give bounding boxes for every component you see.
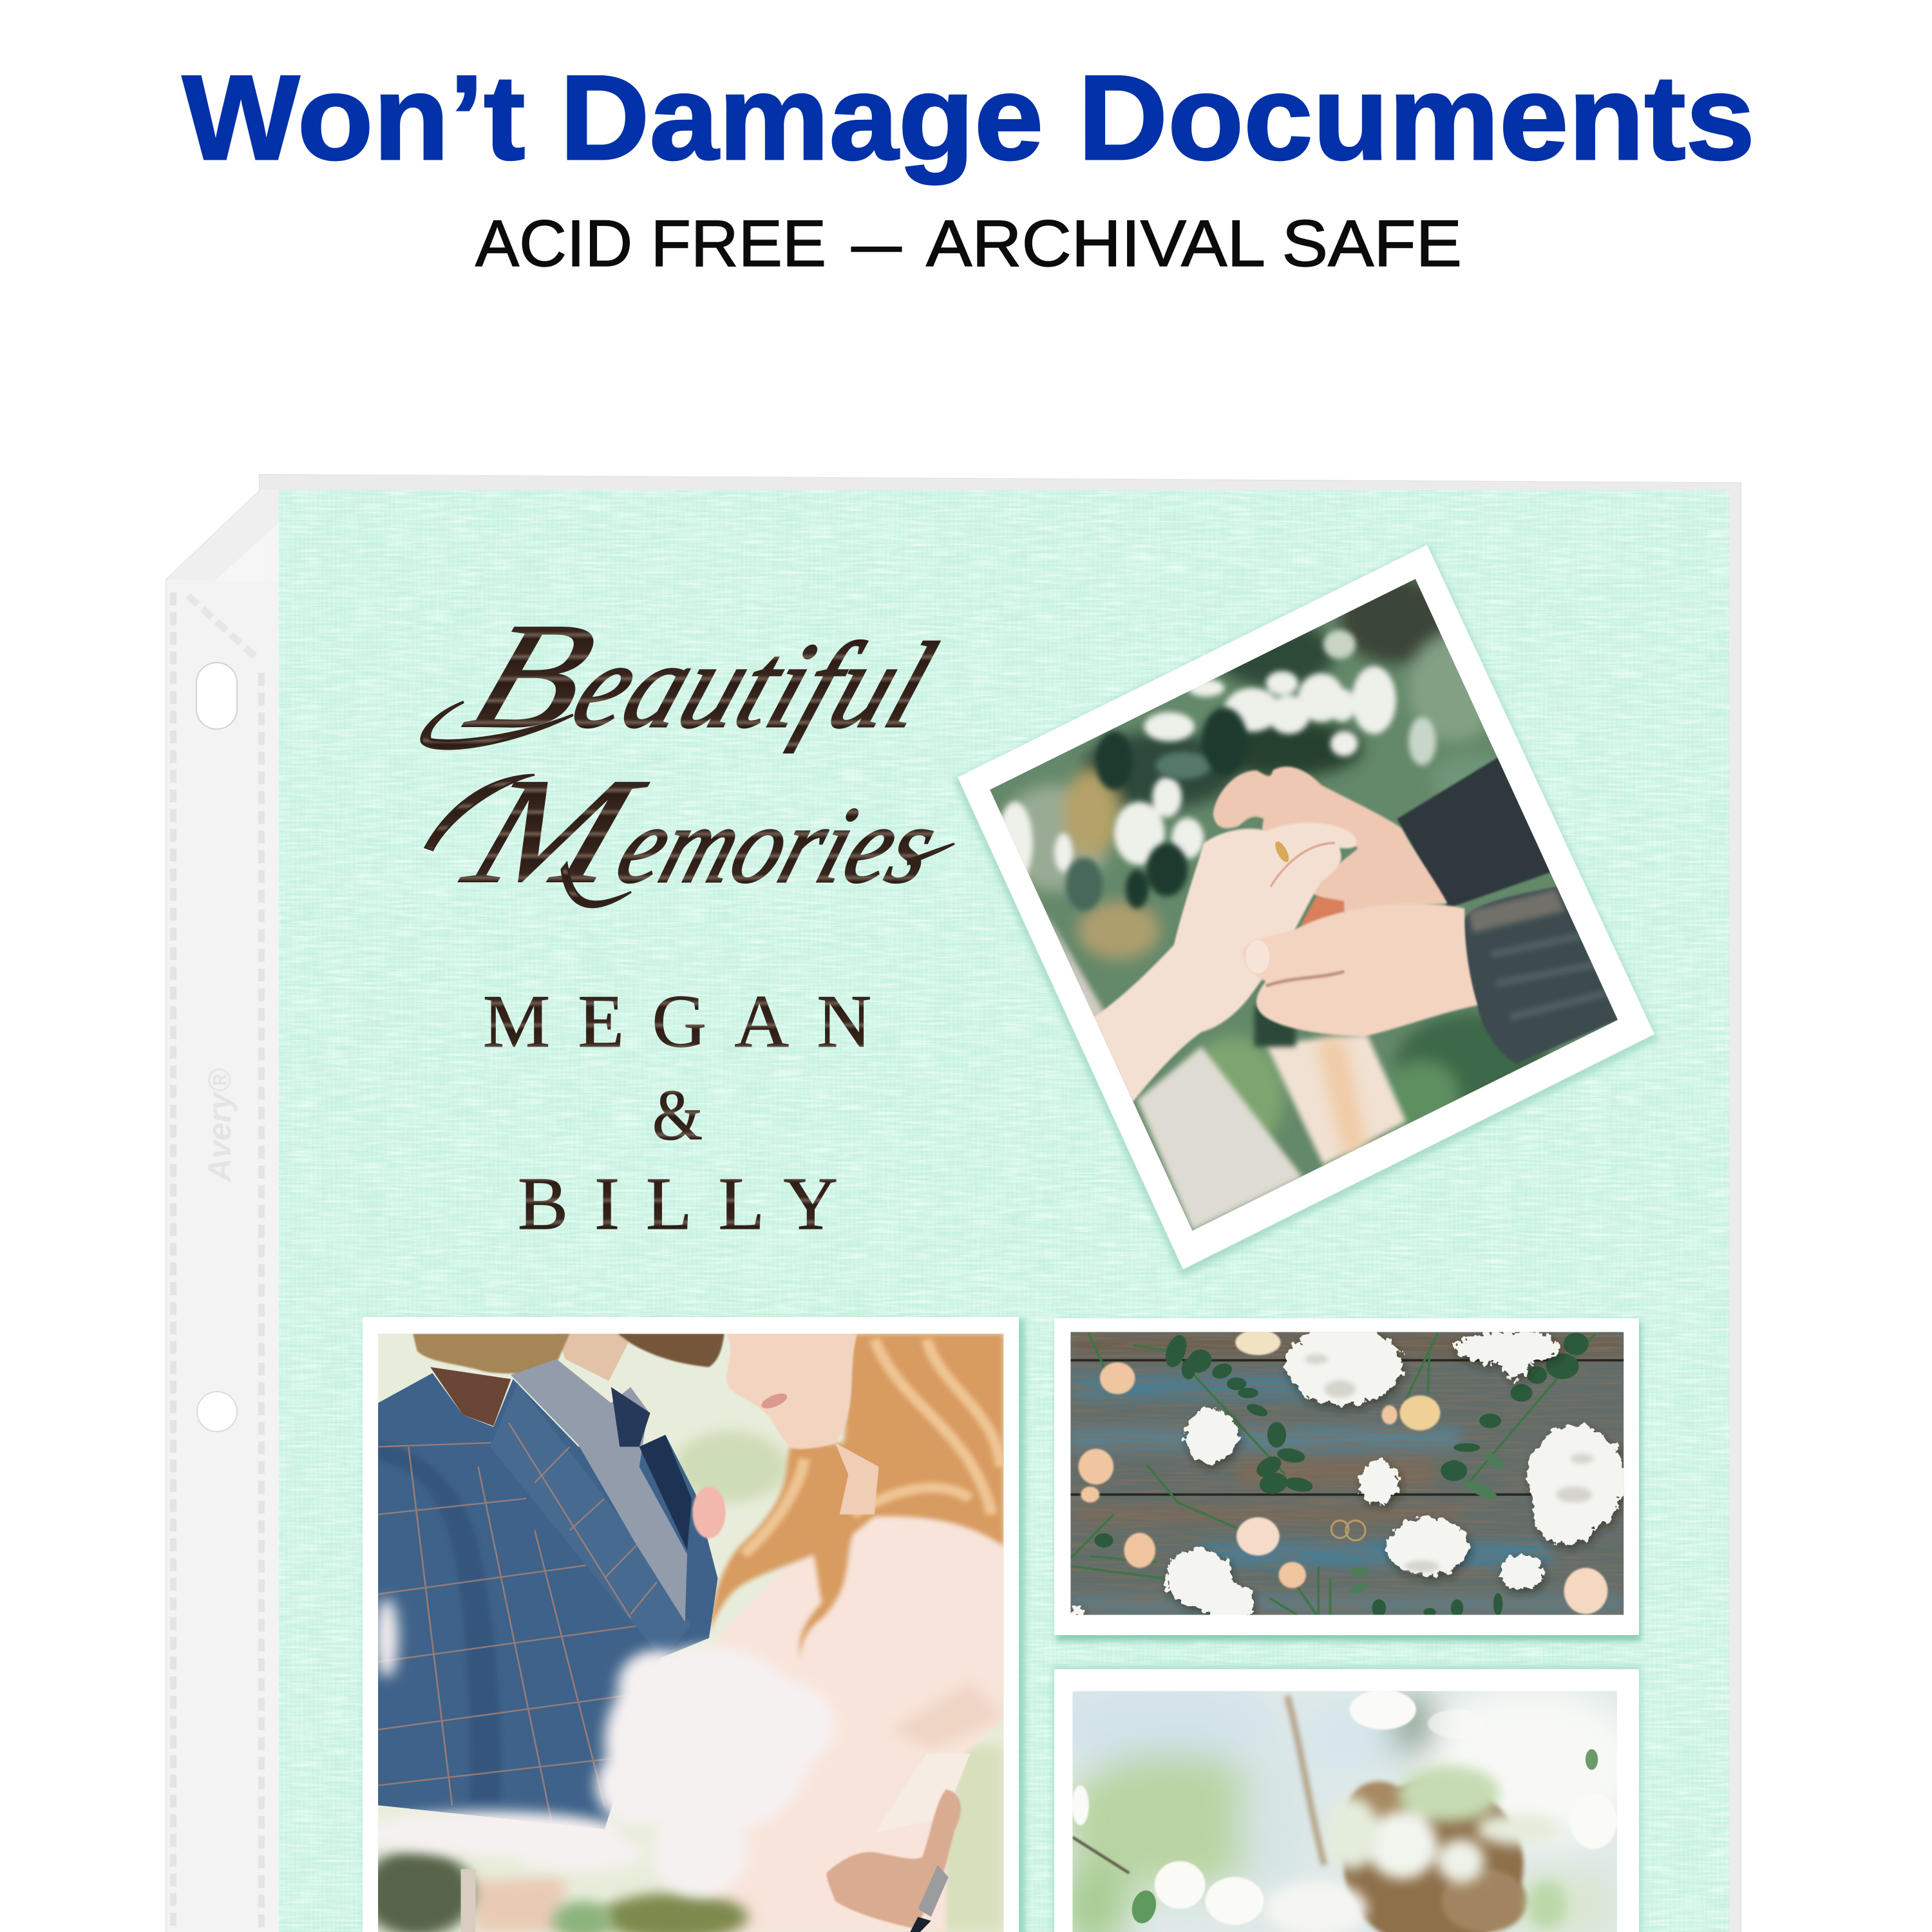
bride face	[726, 1334, 857, 1449]
stitching right column	[258, 673, 265, 1932]
title: Won’t Damage Documents	[182, 50, 1755, 185]
stems	[1070, 1332, 1596, 1615]
photo scene	[1070, 1325, 1625, 1622]
bride dress and arm	[709, 1512, 1004, 1932]
polaroid shadow	[958, 549, 1654, 1273]
braided hair	[1344, 1781, 1524, 1932]
blurred sky and foliage	[1043, 1681, 1640, 1932]
capital B: B	[448, 592, 616, 759]
names text	[483, 980, 871, 1245]
wedding ring	[1273, 839, 1291, 864]
hair highlights	[744, 1339, 1001, 1555]
subtitle	[475, 207, 1462, 280]
dark sleeve end	[910, 1917, 931, 1932]
sleeve texture	[1492, 935, 1606, 1018]
stitching diagonal	[188, 596, 259, 660]
bride hand and arm	[1094, 822, 1357, 1103]
infographic canvas	[166, 75, 1751, 1932]
eucalyptus leaves	[1094, 1332, 1589, 1617]
photo background	[1072, 1691, 1617, 1932]
suit jacket	[378, 1373, 717, 1829]
sleeve shading	[378, 1443, 501, 1801]
groom hand	[826, 1790, 961, 1929]
plaid pattern	[378, 1443, 665, 1825]
lowercase run: emories	[604, 784, 951, 905]
sleeve highlight	[1468, 889, 1565, 933]
name: BILLY: BILLY	[518, 1162, 838, 1245]
bride hair mass	[709, 1334, 1004, 1658]
photo: couple embracing	[361, 1317, 1025, 1932]
photo frame	[1054, 1318, 1639, 1635]
small leaf	[1586, 1749, 1598, 1770]
peach sash	[1266, 1034, 1406, 1165]
green leaf	[1128, 1888, 1160, 1926]
photo background	[990, 579, 1618, 1231]
bouquet stem	[1255, 1005, 1296, 1046]
groom hair	[413, 1334, 570, 1374]
lapel plaid	[509, 1423, 657, 1618]
linen horizontal threads	[279, 490, 1729, 1932]
photo scene	[990, 579, 1618, 1231]
linen base	[279, 490, 1729, 1932]
groom beard	[618, 1334, 724, 1367]
photo scene	[361, 1334, 1004, 1932]
sharp white blossoms	[1072, 1690, 1617, 1925]
photo: rings and flowers on wood	[1054, 1318, 1641, 1641]
photo background	[378, 1334, 1004, 1932]
groom lower hand	[1243, 904, 1477, 1037]
dress upper sliver	[1045, 911, 1105, 1027]
branch	[1287, 1696, 1324, 1865]
peach roses	[1079, 1330, 1607, 1614]
binding strip	[166, 581, 279, 1932]
hair upper lock	[1348, 1781, 1410, 1837]
peach stripe	[1316, 1037, 1367, 1158]
linen mottling	[279, 490, 1729, 1932]
lower olive foliage	[600, 1893, 748, 1932]
jacket collar	[430, 1367, 511, 1426]
linen light threads	[279, 490, 1729, 1932]
stitching left column	[170, 592, 176, 1932]
wedding rings	[1331, 1520, 1365, 1540]
watch	[918, 1865, 949, 1917]
watermark logo: Avery®	[202, 1068, 238, 1183]
ampersand: &	[652, 1075, 703, 1155]
bracelet	[461, 1869, 475, 1932]
finger crease	[1271, 843, 1335, 887]
pocket outline	[166, 475, 1741, 1932]
thumbnail	[1245, 940, 1269, 973]
photo scene	[1043, 1681, 1640, 1932]
arm underside shadow	[892, 1681, 1004, 1750]
checked shirt	[511, 1359, 687, 1622]
panel: sheet protector pocket	[166, 475, 1741, 1932]
panel: mint linen page	[279, 490, 1729, 1932]
plank gaps	[1070, 1360, 1624, 1495]
lower sleeve	[1463, 887, 1618, 1063]
photo: blossoms and braided hair	[1043, 1665, 1642, 1932]
capital M: M	[446, 748, 663, 914]
pocket fold	[166, 490, 279, 581]
photo frame	[1054, 1669, 1639, 1932]
dark tie shadow	[611, 1387, 650, 1447]
white blossoms	[998, 630, 1436, 884]
dark leaves	[1066, 707, 1247, 911]
wood grain	[1070, 1332, 1624, 1615]
right lapel	[687, 1530, 717, 1638]
boutonniere	[692, 1486, 726, 1539]
bride dress	[1137, 1046, 1303, 1231]
lower left foliage	[361, 1849, 474, 1932]
blurred leaves over hair	[1265, 1765, 1566, 1932]
bride lips	[759, 1390, 790, 1412]
greener mid background	[674, 1431, 788, 1502]
punched round hole	[197, 1392, 237, 1432]
groom upper hand	[1213, 766, 1448, 916]
frame shadow	[365, 1319, 1025, 1932]
subtitle: ARCHIVAL SAFE	[926, 207, 1462, 280]
photo frame	[363, 1317, 1019, 1932]
subtitle: ACID FREE	[475, 207, 826, 280]
hair lower braid	[1441, 1869, 1528, 1932]
right edge of pocket	[1729, 483, 1741, 1932]
swash of B	[421, 702, 573, 749]
wood colour bands	[1070, 1335, 1624, 1614]
groom neck	[556, 1334, 633, 1381]
frame shadow	[1056, 1321, 1641, 1641]
top edge of pocket	[260, 475, 1741, 490]
lapel	[490, 1383, 692, 1658]
tilted photo: holding hands	[953, 528, 1674, 1288]
frame shadow	[1052, 1665, 1642, 1932]
white carnations	[1070, 1325, 1625, 1622]
blurred white blossoms	[361, 1598, 835, 1897]
upper sleeve	[1397, 756, 1551, 909]
script heading: Memories	[425, 748, 954, 914]
inner fingers	[1300, 896, 1344, 925]
bride neck	[835, 1443, 879, 1515]
swash of M	[425, 775, 954, 907]
dark twig	[1072, 1837, 1129, 1873]
background bottom right	[927, 1745, 1004, 1932]
palm crease	[1266, 971, 1344, 986]
linen weave grid	[279, 490, 1729, 1932]
script heading: Beautiful	[421, 592, 951, 759]
blurred foliage	[999, 576, 1551, 1153]
lowercase run: eautiful	[557, 618, 951, 753]
polaroid frame	[958, 545, 1654, 1269]
wood background	[1070, 1332, 1624, 1615]
subtitle: —	[851, 207, 902, 280]
punched oval hole	[196, 663, 237, 729]
linen vertical threads	[279, 490, 1729, 1932]
name: MEGAN: MEGAN	[483, 980, 871, 1063]
petal shading	[1305, 1354, 1594, 1572]
textured dress	[875, 1754, 971, 1833]
lower arm skin	[474, 1877, 565, 1932]
inner jacket	[639, 1435, 692, 1550]
lower green foliage	[552, 1901, 613, 1932]
